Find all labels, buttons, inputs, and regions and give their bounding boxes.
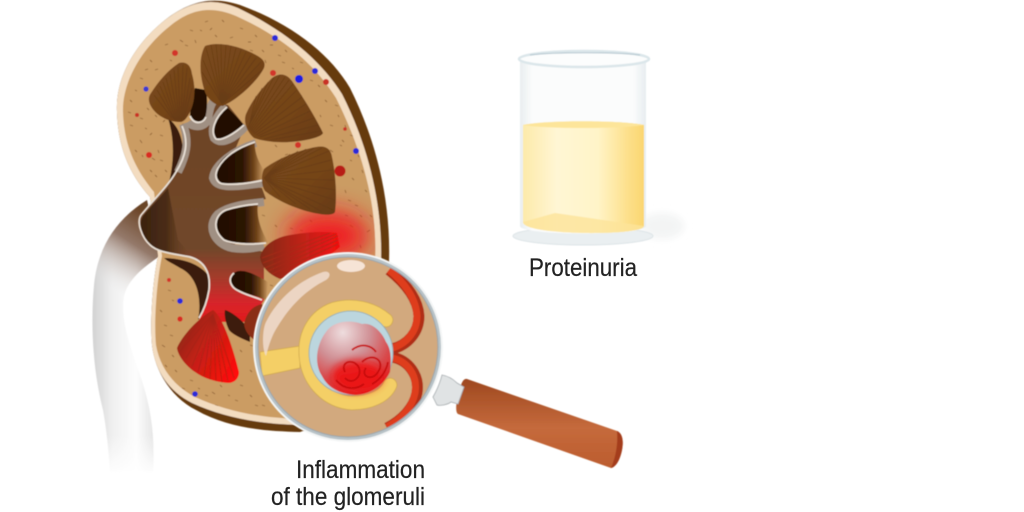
- inflamed pyramid lower: [177, 310, 239, 383]
- label: proteinuria: Proteinuria: [529, 254, 637, 282]
- lens reflections: [337, 260, 365, 272]
- white calyx edges: [139, 107, 266, 318]
- kidney: [117, 1, 389, 432]
- renal pelvis: [139, 103, 266, 322]
- pyramid 2: [200, 44, 265, 106]
- bowman space: [309, 311, 393, 395]
- efferent arteriole: [389, 270, 419, 349]
- beaker glass: [520, 58, 646, 234]
- small inflamed pyramid: [244, 304, 270, 342]
- beaker of urine: [513, 51, 684, 245]
- label: inflammation of the glomeruli: of the glomeruli: [271, 483, 425, 511]
- lens rim: [258, 257, 438, 437]
- pyramid 3: [245, 74, 323, 142]
- kidney outer capsule: [117, 1, 389, 432]
- cortex speckles: [128, 20, 372, 411]
- beaker shadow: [640, 213, 684, 239]
- label: inflammation of the glomeruli: [271, 456, 425, 511]
- label: inflammation of the glomeruli: Inflammation: [296, 456, 425, 484]
- magnifier handle: [456, 379, 623, 468]
- red inflammation glow: [286, 210, 370, 262]
- calyx holes: [190, 88, 268, 342]
- beaker base: [513, 227, 653, 245]
- kidney cortex rim: [117, 2, 381, 425]
- glomerulus mass: [317, 322, 391, 395]
- magnifying glass: [253, 252, 623, 468]
- hilum shadow: [141, 188, 192, 256]
- kidney cortex: [123, 10, 375, 419]
- proximal tubule: [260, 346, 300, 376]
- afferent arteriole: [387, 357, 417, 428]
- liquid: [523, 121, 644, 233]
- grey calyx bands: [178, 102, 264, 249]
- bowman capsule: [306, 307, 390, 403]
- dark shading beside pelvis: [164, 118, 210, 320]
- inflamed pyramid upper: [260, 232, 340, 279]
- blood vessel dots: [135, 35, 359, 397]
- pyramid 1: [149, 63, 194, 122]
- lens view: [258, 257, 438, 437]
- beaker rim: [519, 51, 649, 67]
- pyramid 4: [262, 146, 336, 215]
- magnifier ferrule: [433, 375, 464, 405]
- lens ring: [253, 252, 443, 442]
- glomerulus redness: [331, 360, 383, 392]
- capillary loops: [336, 346, 388, 388]
- ureter: [92, 200, 160, 476]
